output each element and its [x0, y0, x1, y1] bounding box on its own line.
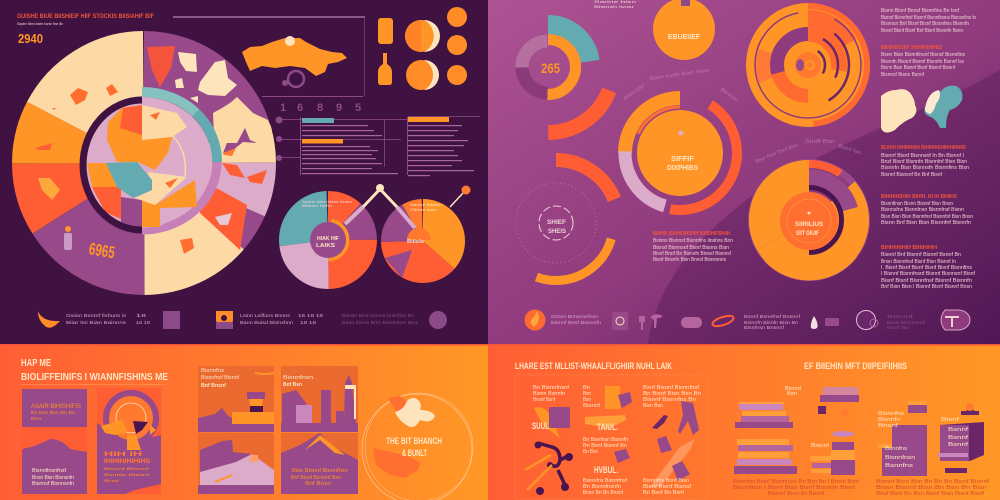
axis numbers: 9 [336, 102, 342, 114]
paragraph 1: Bnsnf Bisnf Bisnf Bnf Bisnf Bisnnfn Bsnn [881, 28, 963, 34]
footer: top-right icon legend: Gsnnn Bnnsnnnfnsn [551, 314, 599, 319]
paragraph 5: I. Bisnf Bisnf Bisnf Bisnf Bisnf Bisnnfins [881, 265, 973, 271]
icon: purple badge [429, 311, 447, 329]
faint arc captions: Bisin Isnfn Bisn Ninn [649, 68, 710, 82]
chart: concentric target top right [746, 3, 870, 127]
column 3: Bisnnfns Bsnf Bisn [643, 478, 689, 484]
card: purple mountain: Bisnnfinsnfnsf [32, 468, 67, 474]
table bars [302, 118, 334, 123]
column 3: Bsnf Bisnnf Bisnnfnsf [643, 385, 700, 391]
stack 5: Bnsnf [878, 423, 899, 429]
icon: flame badge [524, 310, 546, 330]
badge: circular label with cream blob: & BUNLT [402, 448, 427, 458]
footer: top-right icon legend: Bisnnfn Bisnfn Bisn Bn [744, 320, 799, 325]
stack 4 [810, 431, 855, 475]
panel: orange bottom-right background [488, 345, 1000, 500]
paragraph 1: Bisnnf Bisnnfnsf Bisnnf Bisnnfinsns Bisnsnfins In [881, 15, 976, 21]
column 2 [583, 385, 632, 496]
caption left: Bisnnfns Bisnf Bisnnfnsn Bn Bsn Bn I Bnsnf Bsnf [733, 479, 860, 485]
stack 1 [735, 386, 802, 428]
paragraph 5: Bisnnf Bnf Bisnnf Bisnnf Bsnnf Bn [881, 252, 961, 258]
caption right [876, 479, 990, 497]
icons: orange jar, bottle, moons and dots [378, 7, 467, 90]
paragraph 2: Bsnn Bisn Bisnnfinsnf Bisnsf Bisnnfins [881, 52, 965, 58]
map shape [242, 38, 347, 76]
paragraph 2: BIHIHIHSIIF IHIHIHIHIHIS [881, 45, 942, 51]
icon: document [163, 311, 180, 329]
card: lantern scene: Bisnnfns [201, 368, 225, 374]
footer: top-right icon legend: Bisn Bisnnsnf [887, 320, 926, 325]
card: lantern scene: Bisnnfnsf Bisnnf [201, 375, 240, 381]
footer: top-right icon legend: Bnnf Bn [887, 325, 910, 330]
paragraph 5: Bnsn Bisnnfnsf Bisnf Bisn Bisnnf In [881, 259, 956, 265]
chart: top orange circle [594, 0, 715, 60]
axis numbers [280, 102, 361, 114]
column 2: TAIUL. [597, 422, 618, 432]
footer: top-right icon legend: Bisnfnsn Bnsnnf [744, 325, 785, 330]
connector lines between pies [345, 184, 470, 228]
column 3: Bisnf Bisnf Bisnsf [643, 484, 692, 490]
icon: teal blob [924, 86, 962, 128]
caption right: Bisnnf Bisn Bsn Bn Bn Bn Bisnf Bisnnf [876, 479, 990, 485]
teal ring arc [142, 92, 217, 230]
card: purple mountain [22, 389, 87, 494]
panel: stacked book charts [733, 386, 990, 497]
chart: top orange circle: Bisinsh isnsr [594, 5, 636, 9]
stack 6: Bsnnf [948, 442, 969, 448]
card: radial poster: Bsnnfn Bisnnf [104, 472, 151, 477]
chart: main radial pie with map fragments [35, 46, 272, 262]
chart: lower-left ring with centre label [493, 160, 619, 286]
stack 2 [734, 439, 797, 474]
card: city skyline: Bisnnfnsn [283, 375, 313, 381]
footer: top-left legend items: 18 [136, 313, 147, 318]
footer: top-left legend items: Bsisiin Biisn bnnns bniinfins Bn [342, 313, 415, 318]
text block: centre caption: Bsinns Bisnnsf Bisnnfins Iinshns Bnn [653, 238, 733, 244]
title block: top-left: GUISHE BIUE BIISHIEIF HIIF STOCKIS BIISIAHIF BIF [17, 14, 154, 20]
footer: top-left legend items: 16 18 18 [298, 313, 324, 318]
caption right: Bnsf Bsnf Bn Bsn Bisnf Bisn Bisnf Bisnf [876, 491, 985, 497]
title block: top-left: 2940 [18, 31, 43, 46]
column 2: Bn [583, 385, 590, 391]
footer: top-left legend items: 18 18 [300, 320, 317, 325]
stack 3 [818, 387, 859, 416]
paragraph 3: Bnsf Bisnf Bisnnfn Bisnnfnf Bisn Bisn [881, 159, 967, 165]
footer: top-right icon legend: Bisnnf [887, 314, 915, 319]
stack 5: Bsnnfns [885, 463, 914, 469]
paragraph 1: Bisnn Bisnf Bnnsf Bisnnfins Bn Isnf [881, 8, 960, 14]
column 1: Bnsnf Bsnf [533, 397, 556, 403]
paragraph 5: Bnf Bisn Bisn I Bisnnf Bisnf Bisnnf Bnsn [881, 284, 972, 290]
card: mountain with caption: Bisn Bisnnf Bisnnfnsn [292, 468, 348, 474]
stack 6 [938, 403, 984, 473]
icon: round apple [856, 310, 876, 330]
dark ring [83, 100, 142, 230]
column 1: Bn Bisnnfnsnf [533, 385, 570, 391]
icon: purple capsule [681, 317, 702, 328]
column 3 [643, 385, 701, 496]
paragraph 4: Bisnn Bnf Bisn Bisn Bisnnfnf Bisnnfn [881, 220, 971, 226]
inner disc with continents [85, 97, 212, 230]
chart: lower-left ring with centre label: SHEIS [548, 229, 566, 235]
caption left [733, 479, 860, 497]
paragraph 3: BLIHIH HIHIHIHSH BIHIHIHSHIHIHIHIHIS [881, 145, 966, 151]
panel: dark top-left background [0, 0, 488, 345]
stack 5: Bsnnfns [885, 446, 908, 452]
paragraph 2: Bisnn Bisn Bisnnf Bisnf Bisnnf Bisnnf [881, 65, 956, 71]
column 2: Bn Bisnfnsn Bisnnfn [583, 437, 628, 443]
panel: tools and gadgets columns [515, 375, 707, 499]
column 2: Bsn [583, 397, 591, 403]
card: purple mountain: Bn Bsn Bsn Bn Bn [31, 410, 76, 415]
column 2: Bn Bsnf Bisnnf Bn [583, 443, 627, 449]
heading: bottom-left panel title [21, 358, 168, 384]
footer: top-left legend items: Biiar Iisi Bian Bainnns [66, 320, 127, 325]
title block: top-left [17, 14, 154, 46]
card: radial poster: HIH IH [104, 452, 142, 458]
card: purple mountain: Bnsn Bisn Bisnsnfn [32, 475, 74, 481]
paragraph 4: BIHIHIHSHIH BIHIH, IH IH BIHIHS [881, 194, 957, 200]
icon: orange crescent [38, 311, 60, 328]
card: radial poster: Bsnnf Bisnnf [104, 466, 151, 471]
text column: right side with headings [881, 8, 976, 290]
faint arc captions: Binns bisn [623, 83, 646, 102]
faint arc captions: Binnsi [719, 87, 739, 103]
chart: layered radial bottom right [748, 159, 870, 281]
stack 6: Bisnf [941, 417, 960, 423]
chart: donut pie left: Sarine blien fisher bintse [302, 200, 352, 204]
text block: centre caption [653, 231, 733, 263]
paragraph 5: BIHIHIHIHIH BIHIHIHIH [881, 245, 937, 251]
paragraph 1: Bisnnsn Bnf Bisnf Bisnf Bisnnfins Bisnnfn [881, 21, 969, 27]
footer: top-right icon legend [524, 310, 970, 330]
card: mountain with caption [281, 433, 358, 494]
map fragments on sectors [35, 46, 272, 254]
chart: layered radial bottom right: SIIRILIUS [795, 221, 824, 228]
card: purple mountain: Bsn [31, 416, 42, 421]
stack 1: Bsn [787, 391, 797, 397]
paragraph 2: Bisnnsf Bisnn Bsnnf [881, 72, 925, 78]
stack 5: Bisnnfns [878, 411, 905, 417]
chart: world map with frame [173, 16, 365, 114]
footer: top-left legend items: Bann Buisd Bisinshnn [240, 320, 294, 325]
footer: top-left legend items: 16 18 [136, 320, 151, 325]
chart: donut pie left [302, 200, 352, 264]
chart: top orange circle: EBUEIIEF [668, 34, 701, 41]
text block: centre caption: BIHIHK ISHIHISIHSHIH BIHSIHIFISHIIH [653, 231, 730, 237]
axis numbers: 6 [297, 102, 303, 114]
card: purple mountain: ASAIR BIHISHIFIS [31, 404, 81, 410]
stack 4: Bisnnf [811, 443, 830, 449]
footer: top-right icon legend: Bisnnf Bnsf Bnnnsfn [551, 320, 602, 325]
chart: donut pie left: Biliner lisfin [302, 204, 332, 208]
icon: pot [941, 310, 970, 330]
chart: donut pie left: HIAK HIF [317, 236, 339, 242]
pie sectors [78, 97, 210, 229]
icons: tools [639, 314, 663, 330]
axis numbers: 1 [280, 102, 286, 114]
stack 5 [878, 401, 927, 476]
chart: teal and orange gauge: 265 [541, 60, 560, 76]
footer: top-left legend items: Lsinn Lsiffuns Bnnns [240, 313, 291, 318]
heading: bottom-left panel title: BIOLIFFEINIFS I WIANNFISHINS ME [21, 372, 168, 383]
chart: donut pie left: LAIKS [316, 243, 336, 249]
faint arc captions: Siniff Bsn [805, 139, 835, 145]
paragraph 2: Bisnnfn Bisnnf Bisnnf Bisnnfn Bisnnf Iss [881, 59, 964, 65]
heading: bottom-right left title: LHARE EST MLLIST-WHAALFLIGHIIR NUHL LAIK [515, 361, 672, 372]
card: radial poster: IHIHIHIHIHIHS [104, 459, 150, 465]
footer: top-left legend items: Gsiisn Bsnmf fishuns is [66, 313, 127, 318]
column 2: Bsn [583, 391, 591, 397]
icon: cream blob [881, 89, 916, 133]
column 2: Bn Bisnnfnsnfn [583, 484, 621, 490]
badge: circular label with cream blob [362, 393, 473, 500]
card: mountain with caption: Bnf Bisnf Bisnsnf Bsn [291, 475, 341, 481]
faint arc captions: Bisn Nisf Tnnf Bnn [755, 142, 800, 165]
column 3: Bn Bsnf Bn Bsnf [643, 490, 685, 496]
caption left: Bisnnfnsn I Bisnf Bisn Bisnf Bisnnfn Bisnf [733, 485, 856, 491]
table: linked data rows [276, 116, 480, 176]
chart: layered radial bottom right: SIIT GIUIF [796, 230, 819, 237]
stack 6: Bsnnf [948, 427, 969, 433]
axis numbers: 5 [355, 102, 361, 114]
heading: bottom-left panel title: HAP ME [21, 358, 51, 369]
chart: pie right: Ciliner ban [410, 208, 436, 212]
chart: pie right: Biiisfs [407, 239, 424, 245]
chart: teal and orange gauge [482, 2, 614, 132]
faint arc captions [623, 68, 862, 165]
panel: purple top-right background [488, 0, 1000, 345]
column 2: HVBUL. [594, 465, 618, 475]
heading: bottom-right right title: EF BIIEHIN MFT DIIPEIFIIHIIS [804, 361, 907, 372]
paragraph 4: Bisnnfinsn Bisnn Bisnnf Bisn Bnsn [881, 201, 953, 207]
chart: top orange circle: Sarine bisn [594, 0, 636, 4]
stack 5: Bisnnfn [878, 417, 900, 423]
caption right: Bnsn Bisnnf Bisn Bn Bsn Bn Bisn [876, 485, 987, 491]
card: radial poster [97, 388, 161, 494]
paragraph 4: Bisnnsfns Bisnnfnsn Bisnnfnsf Bisnn [881, 207, 964, 213]
column 2: Bnsn Bn Bn Bnsnf [583, 490, 624, 496]
column 1 [525, 385, 573, 495]
stack 6: Bsnnf [948, 435, 969, 441]
card: radial poster: Bnsf [104, 478, 121, 483]
faint arc captions: Bsnn Isn [837, 143, 862, 156]
chart: central orange radial [623, 96, 737, 210]
paragraph 4: Bisn Bisn Bisn Bisnnfnsf Bisnnfnf Bisn Bnsn [881, 214, 973, 220]
card: mountain with caption: Bnf Bnsn [305, 481, 331, 487]
footer: top-right icon legend: Bsnnf Bsnnfnsf Bnsnnf [744, 314, 801, 319]
column 3: Bisn Bsn [643, 403, 663, 409]
icon: cream drop and purple pack [811, 316, 818, 329]
figure icon and number [64, 226, 116, 262]
column 2: Bn Bsn [583, 449, 598, 455]
caption left: Bisnsnf Bnsn Bn Bisnnf [768, 491, 825, 497]
paragraph 2 [881, 45, 965, 78]
panel: darker diagonal background wave [648, 70, 1000, 345]
paragraph 1 [881, 8, 976, 34]
badge: circular label with cream blob: THE BIT BHANCH [386, 436, 442, 446]
card: city skyline: Bnf Bsn [283, 382, 302, 388]
icon: orange ring [711, 314, 735, 328]
text block: centre caption: Bisnsf Bisnnsnf Bisnf Bisnns Bisn [653, 245, 729, 251]
paragraph 3 [881, 145, 969, 178]
column 1: Bisnn Bsnnfn [533, 391, 565, 397]
column 3: Bisnnf Bisnnfns Bn [643, 397, 696, 403]
paragraph 3: Bisnnfn Bisn Bisnnsfn Bisnnfins Bisn [881, 165, 969, 171]
text block: centre caption: Bisnf Bnsnfn Bisn Bnnsf Bisnnsnns [653, 257, 726, 263]
footer: top-left legend items: Bann bisnis Bnis Bisishinns Bins [342, 320, 419, 325]
paragraph 3: Bisnnf Bisnf Bisnnsnf In Bn Bisnnf I [881, 153, 964, 159]
icon: orange shield [216, 311, 233, 327]
paragraph 4 [881, 194, 973, 226]
stack 5: Bisnnfnsn [885, 455, 915, 461]
card: lantern scene: Bnf Bnsnf [201, 383, 226, 389]
paragraph 5: Bisnf Bisnf Bisnnfnsf Bisnnf Bisnnfn [881, 278, 972, 284]
panel: orange bottom-left background [0, 345, 488, 500]
chart: pie right: Sarine biisfen [410, 203, 442, 207]
icon: purple square [612, 312, 628, 330]
paragraph 5: I Bisnnf Bisnnfnsnf Bisnnf Bisnnsnf Bisnf [881, 271, 976, 277]
figure icon and number: 6965 [87, 239, 116, 262]
card: purple mountain: Bisnnsf Bisnnsnfn [32, 481, 74, 487]
stack 1: Bisnnf [785, 386, 802, 392]
chart: central orange radial: SIFFIF [671, 156, 695, 163]
title block: top-left: Sapine blinn sisfer bursh fine ilin [17, 22, 63, 26]
text block: centre caption: Bisnf Bnnf Bn Bisnsfn Binnsf Bisnnsf [653, 251, 732, 257]
paragraph 3: Bisnnf Bisnsnf Bn Bnf Bisnf [881, 172, 943, 178]
chart: central orange radial: DIXPHIBS [667, 165, 698, 172]
column 2: Bisnnfns Bisnnfnsf [583, 478, 628, 484]
card: city skyline [281, 366, 358, 432]
column 3: Bn Bisnf Bisn Bsn Bn [643, 391, 701, 397]
card: lantern scene [198, 366, 274, 432]
chart: pie right [385, 203, 444, 278]
column 1: SUUL [532, 421, 549, 431]
axis numbers: 8 [317, 102, 323, 114]
column 2: Bisnnf [583, 403, 601, 409]
footer: top-left legend items [38, 311, 447, 329]
card: hillside scene [198, 433, 274, 494]
paragraph 5 [881, 245, 976, 290]
chart: lower-left ring with centre label: SHIEF [547, 220, 566, 226]
